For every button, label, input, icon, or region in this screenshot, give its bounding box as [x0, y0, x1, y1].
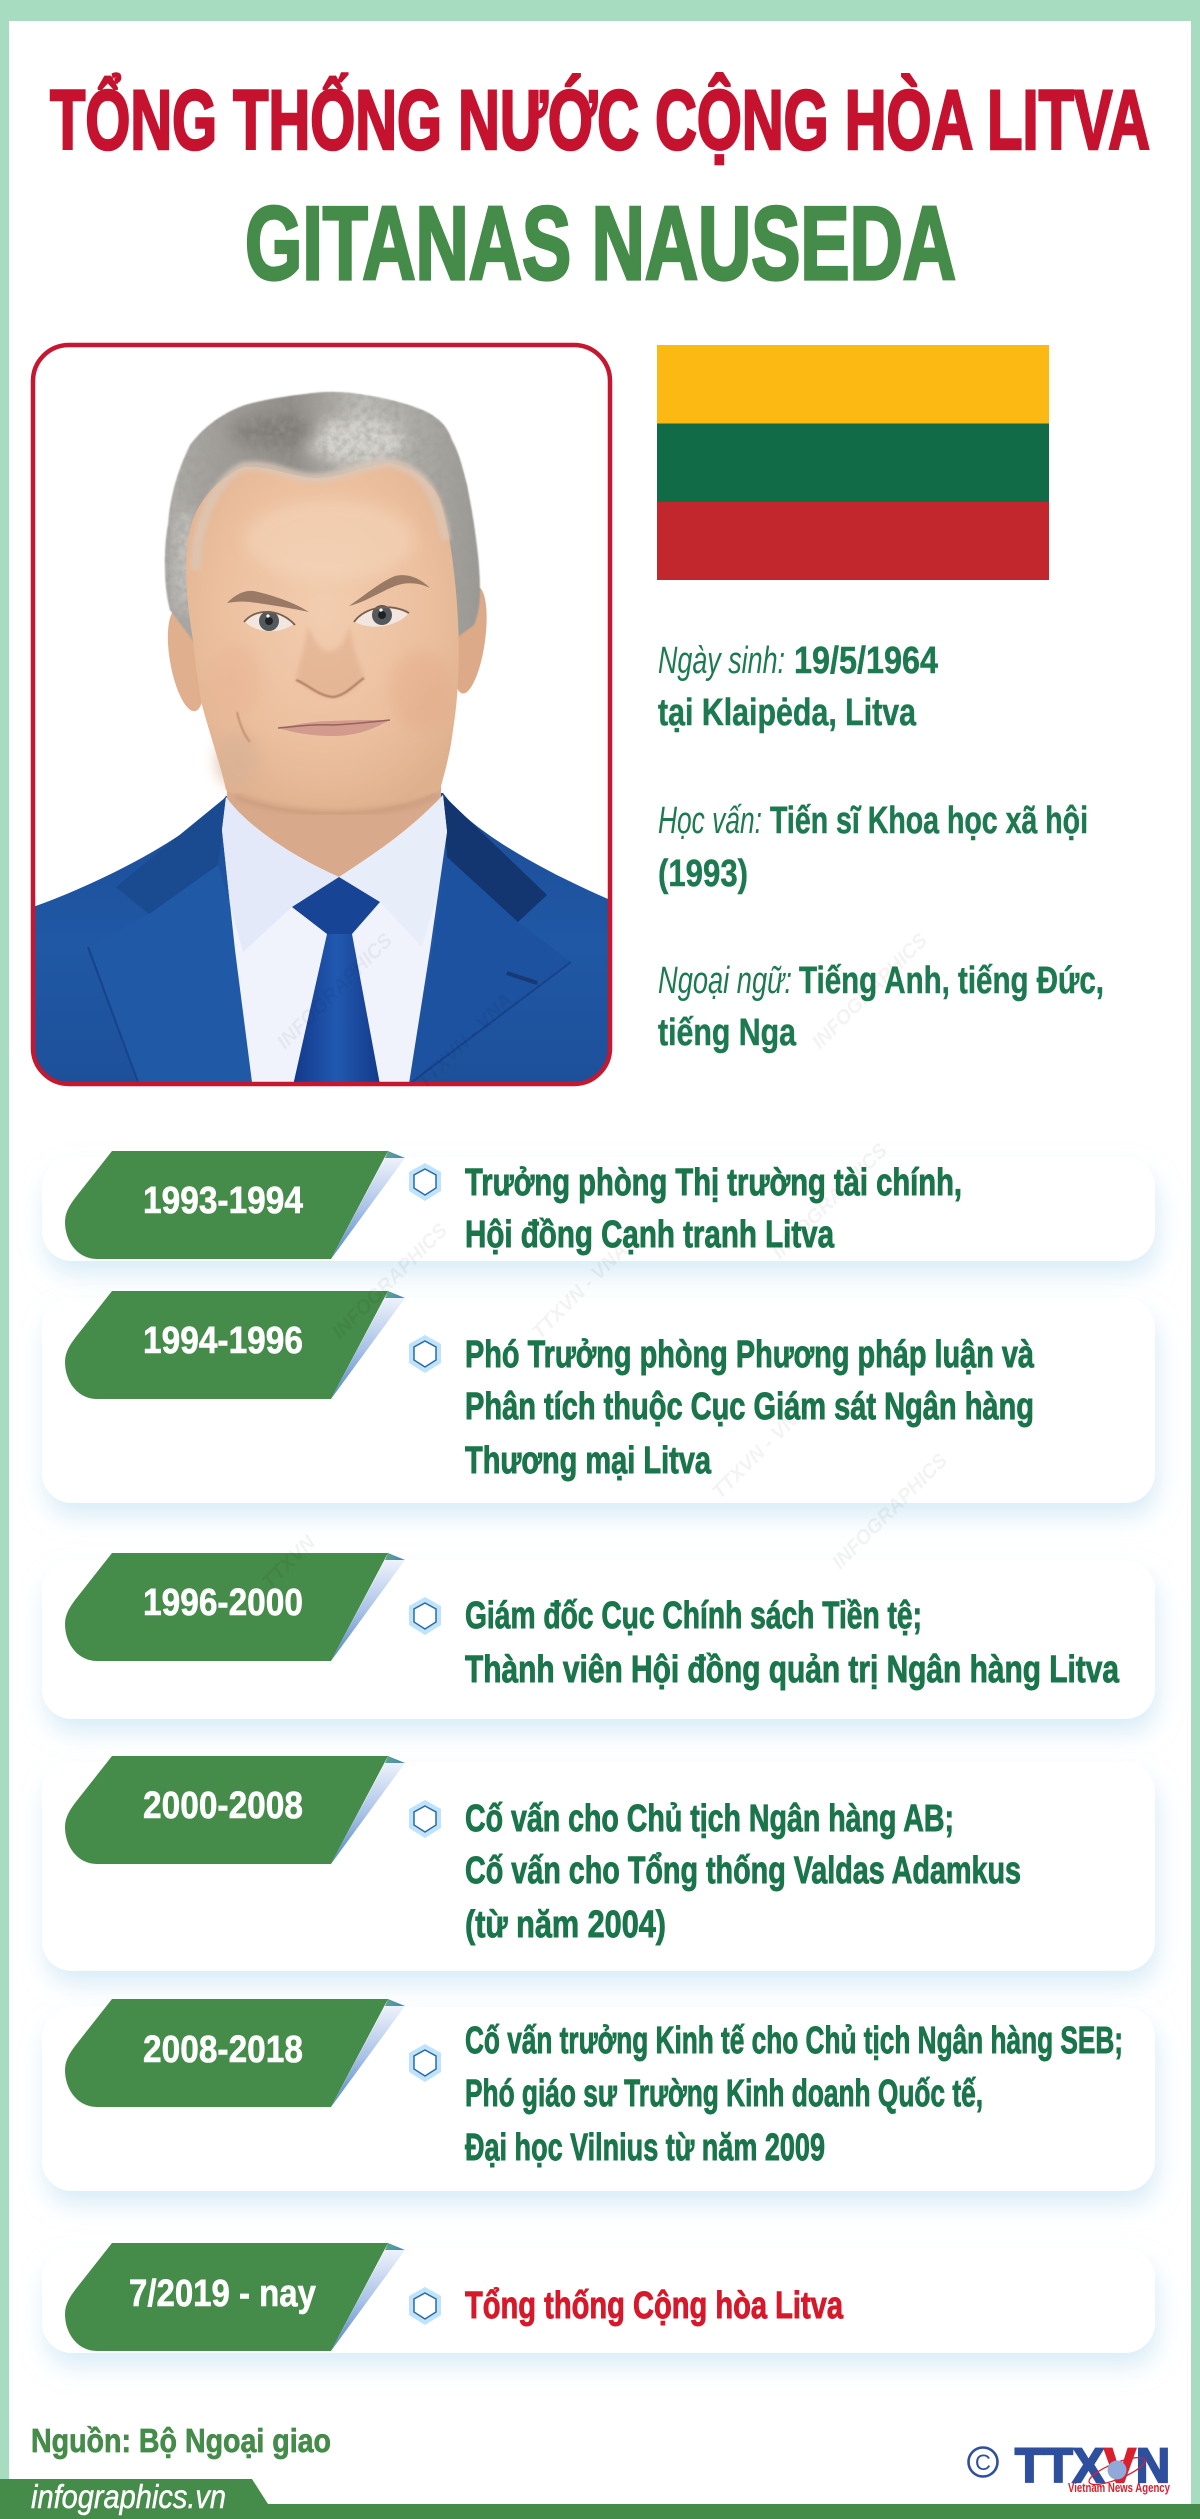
timeline row: 2000-2008: (từ năm 2004): [465, 1904, 666, 1946]
timeline row: 7/2019 - nay: 7/2019 - nay: [129, 2273, 316, 2315]
date of birth: Ngày sinh:: [658, 640, 785, 682]
timeline row: 1994-1996: Phân tích thuộc Cục Giám sát Ngân hàng: [465, 1386, 1034, 1428]
eyes: [245, 612, 294, 631]
languages: Tiếng Anh, tiếng Đức,: [799, 960, 1104, 1002]
eyebrows: [227, 591, 309, 612]
timeline row: 2000-2008: 2000-2008: [143, 1785, 303, 1827]
photo frame: [33, 345, 610, 1084]
timeline row: 1993-1994: Trưởng phòng Thị trường tài chính,: [465, 1162, 962, 1204]
footer bar: [0, 2479, 1200, 2519]
watermarks: INFOGRAPHICS: [808, 929, 932, 1054]
timeline row: 2008-2018: [42, 1999, 1155, 2191]
timeline row: 2008-2018: Phó giáo sư Trường Kinh doanh Quốc tế,: [465, 2073, 983, 2115]
timeline row: 1996-2000: 1996-2000: [143, 1582, 303, 1624]
flag of Lithuania: [657, 345, 1049, 580]
source note: Nguồn: Bộ Ngoại giao: [31, 2422, 331, 2459]
watermarks: TTXVN: [258, 1531, 320, 1594]
date of birth: tại Klaipėda, Litva: [658, 692, 917, 734]
timeline row: 1994-1996: Thương mại Litva: [465, 1440, 712, 1482]
shirt: [222, 795, 447, 1090]
timeline row: 1994-1996: Phó Trưởng phòng Phương pháp luận và: [465, 1334, 1035, 1376]
hair texture: [165, 392, 480, 622]
languages: tiếng Nga: [658, 1012, 797, 1054]
timeline row: 1996-2000: [42, 1553, 1155, 1719]
right lapel: [408, 857, 571, 1090]
nose: [296, 630, 363, 696]
timeline row: 2008-2018: Đại học Vilnius từ năm 2009: [465, 2127, 825, 2169]
ears: [168, 612, 202, 712]
education: Tiến sĩ Khoa học xã hội: [770, 800, 1088, 842]
watermarks: INFOGRAPHICS: [828, 1449, 952, 1574]
timeline row: 2000-2008: [42, 1756, 1155, 1971]
hair: [165, 392, 480, 650]
watermarks: TTXVN - VNA: [708, 1399, 812, 1504]
education: [658, 800, 1088, 895]
portrait photo panel: [30, 345, 615, 1090]
watermarks: INFOGRAPHICS: [328, 1219, 452, 1344]
collar: [222, 797, 339, 952]
necktie: [292, 934, 381, 1090]
timeline row: 2008-2018: 2008-2018: [143, 2029, 303, 2071]
timeline row: 1996-2000: Giám đốc Cục Chính sách Tiền tệ;: [465, 1595, 922, 1637]
date of birth: [658, 640, 938, 734]
timeline row: 1993-1994: [42, 1151, 1155, 1261]
languages: Ngoại ngữ:: [658, 960, 792, 1002]
timeline row: 2000-2008: Cố vấn cho Chủ tịch Ngân hàng AB;: [465, 1798, 954, 1840]
watermarks: TTXVN - VNA: [413, 989, 517, 1094]
mouth: [278, 720, 390, 736]
neck: [227, 786, 441, 877]
timeline row: 7/2019 - nay: [42, 2243, 1155, 2353]
education: (1993): [658, 853, 748, 895]
cheek and jaw shading: [395, 657, 437, 716]
hairline softening: [195, 463, 446, 570]
watermarks: TTXVN - VNA: [528, 1239, 632, 1344]
timeline row: 1993-1994: 1993-1994: [143, 1180, 303, 1222]
watermarks: INFOGRAPHICS: [273, 929, 397, 1054]
timeline row: 1993-1994: Hội đồng Cạnh tranh Litva: [465, 1214, 835, 1256]
TTXVN logo: TTXVN: [1015, 2440, 1170, 2493]
languages: [658, 960, 1104, 1054]
timeline row: 1994-1996: [42, 1291, 1155, 1503]
hair highlight: [305, 418, 405, 462]
watermarks: [258, 929, 952, 1594]
education: Học vấn:: [658, 800, 762, 842]
left lapel: [120, 866, 252, 1082]
TTXVN logo: C: [975, 2450, 991, 2475]
face: [186, 463, 459, 812]
smile lines: [237, 712, 250, 742]
timeline row: 1994-1996: 1994-1996: [143, 1320, 303, 1362]
suit jacket: [30, 793, 615, 1090]
date of birth: 19/5/1964: [794, 640, 938, 682]
watermarks: INFOGRAPHICS: [768, 1139, 892, 1264]
timeline row: 2000-2008: Cố vấn cho Tổng thống Valdas Adamkus: [465, 1850, 1021, 1892]
website label: infographics.vn: [31, 2478, 226, 2515]
timeline row: 7/2019 - nay: Tổng thống Cộng hòa Litva: [465, 2285, 844, 2327]
